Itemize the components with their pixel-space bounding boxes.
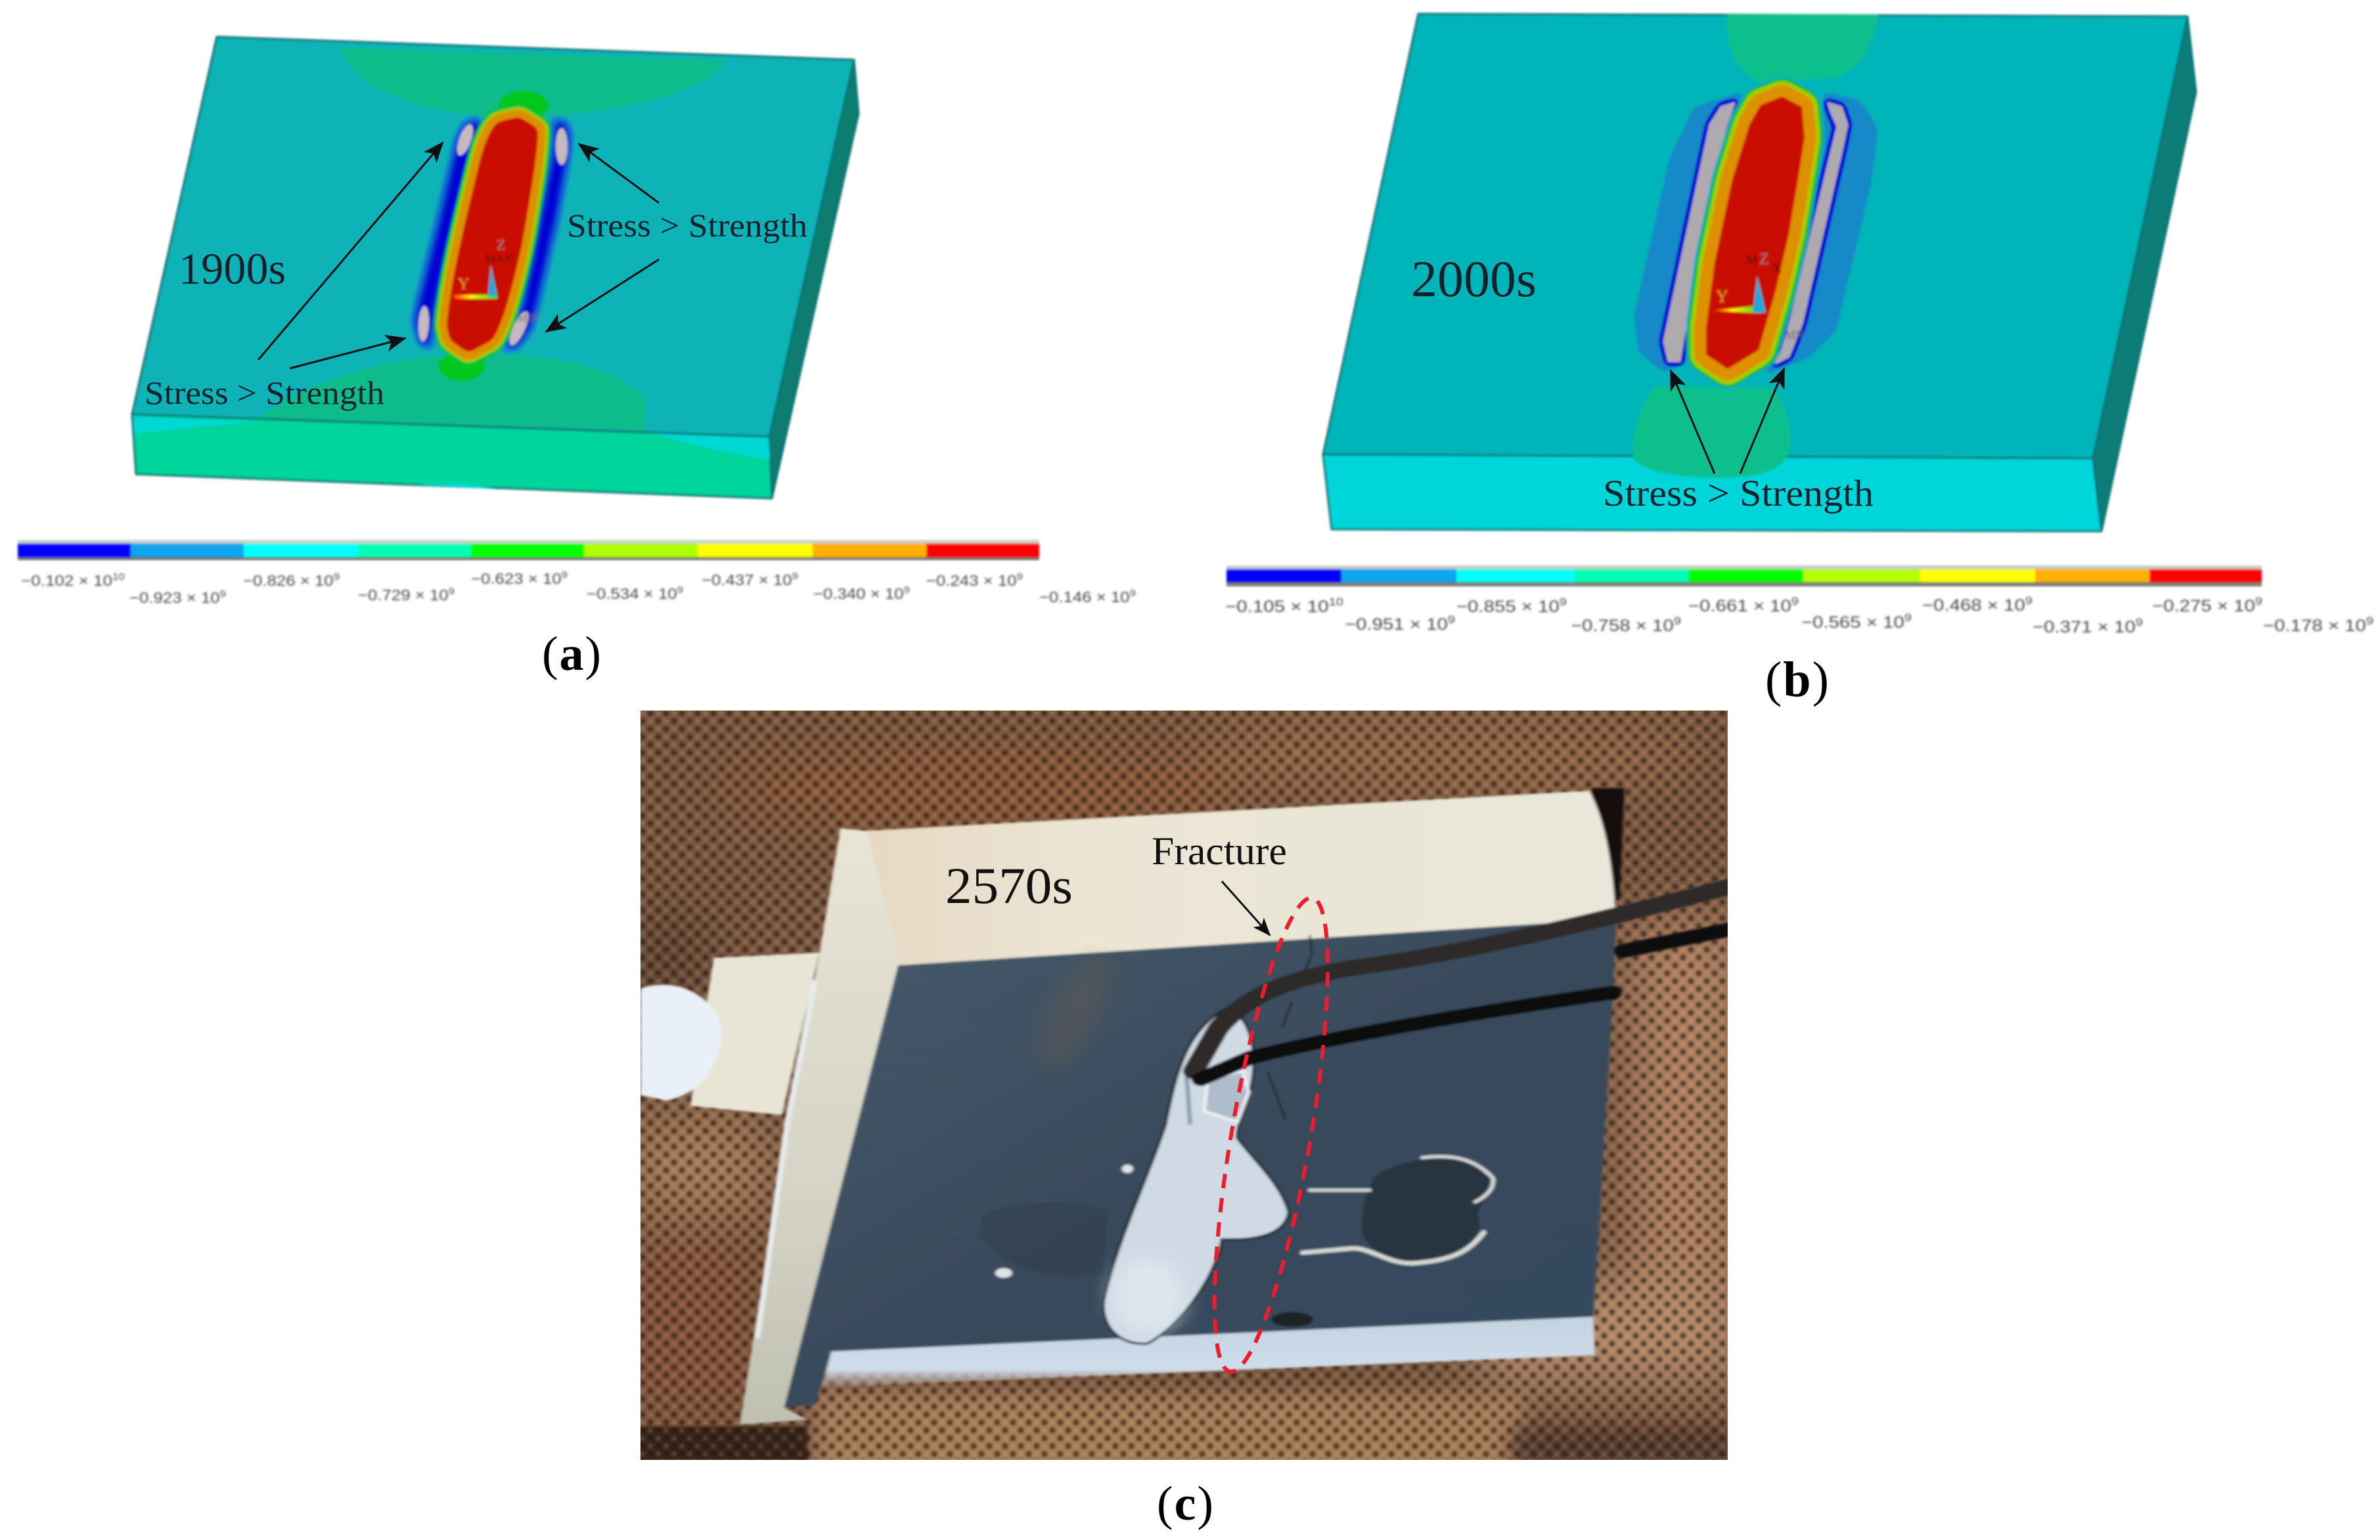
legend labels: −0.243 × 10	[926, 572, 1007, 589]
legend labels: 9	[1674, 615, 1681, 627]
coordinate triad: Z	[1759, 251, 1769, 268]
plate model 2000s	[1323, 14, 2196, 531]
coordinate triad: Y	[458, 276, 469, 293]
front face cyan patches	[133, 416, 770, 489]
legend labels: −0.855 × 10	[1456, 598, 1544, 616]
dark corner	[1591, 788, 1625, 900]
legend labels: −0.340 × 10	[813, 585, 894, 602]
panel: (a) stress contour at 1900s	[18, 37, 1136, 681]
legend labels: −0.468 × 10	[1922, 596, 2010, 615]
box structure in scaled coordinates	[640, 788, 1728, 1424]
green stress patches	[259, 47, 727, 431]
back wall	[864, 791, 1616, 965]
legend labels: 9	[792, 571, 798, 582]
label: 1900s: 1900s	[179, 244, 286, 294]
colour bar	[1226, 565, 2262, 586]
fracture region dashed ellipse	[1191, 891, 1351, 1378]
caption (b): (b)	[1765, 652, 1829, 707]
legend labels: −0.623 × 10	[471, 570, 552, 587]
legend labels: −0.146 × 10	[1039, 588, 1120, 605]
coordinate triad: Y	[1716, 287, 1728, 306]
green stress patches	[1633, 14, 1878, 478]
sealant outline	[1303, 1156, 1493, 1264]
front wall	[822, 1317, 1595, 1387]
floor discolouration	[979, 951, 1491, 1327]
panel: (b) stress contour at 2000s	[1225, 14, 2373, 707]
legend labels: −0.105 × 10	[1225, 598, 1313, 616]
legend labels: −0.923 × 10	[129, 589, 210, 606]
legend labels: 9	[1017, 571, 1023, 583]
legend labels: 9	[220, 588, 226, 600]
label: Fracture: Fracture	[1152, 829, 1287, 873]
legend labels: 9	[449, 586, 455, 597]
stress nugget	[1638, 97, 1874, 370]
legend labels: −0.178 × 10	[2263, 617, 2350, 635]
legend labels	[21, 569, 1136, 606]
left foam blob	[640, 984, 721, 1101]
legend labels: −0.371 × 10	[2032, 618, 2120, 636]
caption (c): (c)	[1157, 1477, 1213, 1531]
caption (a): (a)	[542, 627, 601, 681]
legend labels: 9	[2025, 594, 2032, 607]
coordinate triad: X	[1772, 261, 1782, 276]
legend labels: 9	[1791, 595, 1799, 607]
legend labels: −0.437 × 10	[702, 571, 782, 588]
plate faces	[132, 37, 859, 498]
label: Stress > Strength: Stress > Strength	[1603, 473, 1874, 514]
panel: (c) photograph at 2570s	[631, 711, 1741, 1531]
legend labels: 9	[1904, 611, 1912, 624]
coordinate triad: M	[1746, 253, 1758, 267]
arrows: stress locations	[1671, 368, 1784, 473]
label: Stress > Strength right: Stress > Strength	[567, 207, 807, 244]
arrows: stress locations	[258, 143, 659, 368]
legend labels: −0.102 × 10	[21, 572, 102, 589]
cracks	[1268, 935, 1312, 1119]
legend labels: −0.729 × 10	[358, 586, 439, 604]
legend labels: −0.758 × 10	[1571, 617, 1658, 635]
legend labels: 9	[1560, 596, 1567, 608]
legend labels: 10	[112, 571, 125, 583]
legend labels: −0.826 × 10	[243, 572, 324, 589]
coordinate triad: MAX	[485, 252, 512, 265]
legend labels: 9	[2255, 595, 2262, 607]
legend labels	[1225, 594, 2373, 636]
legend labels: 9	[677, 584, 683, 596]
colour bar	[18, 540, 1039, 560]
left wall	[740, 828, 901, 1424]
legend labels: −0.565 × 10	[1801, 613, 1889, 632]
arrow: fracture	[1222, 881, 1270, 935]
plate faces	[1323, 14, 2196, 531]
legend labels: 9	[334, 571, 340, 583]
photo illustration	[640, 711, 1728, 1460]
coordinate triad: MN	[1785, 328, 1804, 341]
coordinate triad: Z	[497, 236, 505, 253]
stress nugget	[415, 91, 569, 381]
white adhesive mass	[1104, 1007, 1289, 1344]
label: Stress > Strength left: Stress > Strength	[145, 374, 384, 411]
colour legend (b)	[1225, 565, 2373, 636]
tab	[690, 953, 819, 1115]
coordinate triad	[453, 236, 540, 324]
legend labels: 9	[2136, 616, 2143, 628]
legend labels: 9	[562, 569, 568, 581]
legend labels: −0.661 × 10	[1688, 597, 1776, 615]
cables	[1194, 887, 1728, 1079]
plate model 1900s	[132, 37, 859, 498]
label: 2570s: 2570s	[945, 857, 1073, 914]
coordinate triad	[1713, 251, 1804, 341]
floor	[784, 919, 1616, 1407]
legend labels: 9	[904, 584, 910, 596]
legend labels: −0.275 × 10	[2152, 597, 2239, 615]
legend labels: 10	[1329, 596, 1343, 608]
white specks	[995, 1164, 1133, 1278]
legend labels: −0.951 × 10	[1345, 615, 1432, 634]
bright wall edge	[757, 980, 815, 1338]
label: 2000s: 2000s	[1411, 250, 1537, 307]
legend labels: −0.534 × 10	[587, 585, 667, 602]
mesh background	[631, 711, 1741, 1478]
colour legend (a)	[18, 540, 1136, 606]
legend labels: 9	[1130, 588, 1136, 599]
legend labels: 9	[2366, 615, 2373, 627]
coordinate triad: MIN	[517, 311, 540, 324]
legend labels: 9	[1448, 613, 1455, 626]
